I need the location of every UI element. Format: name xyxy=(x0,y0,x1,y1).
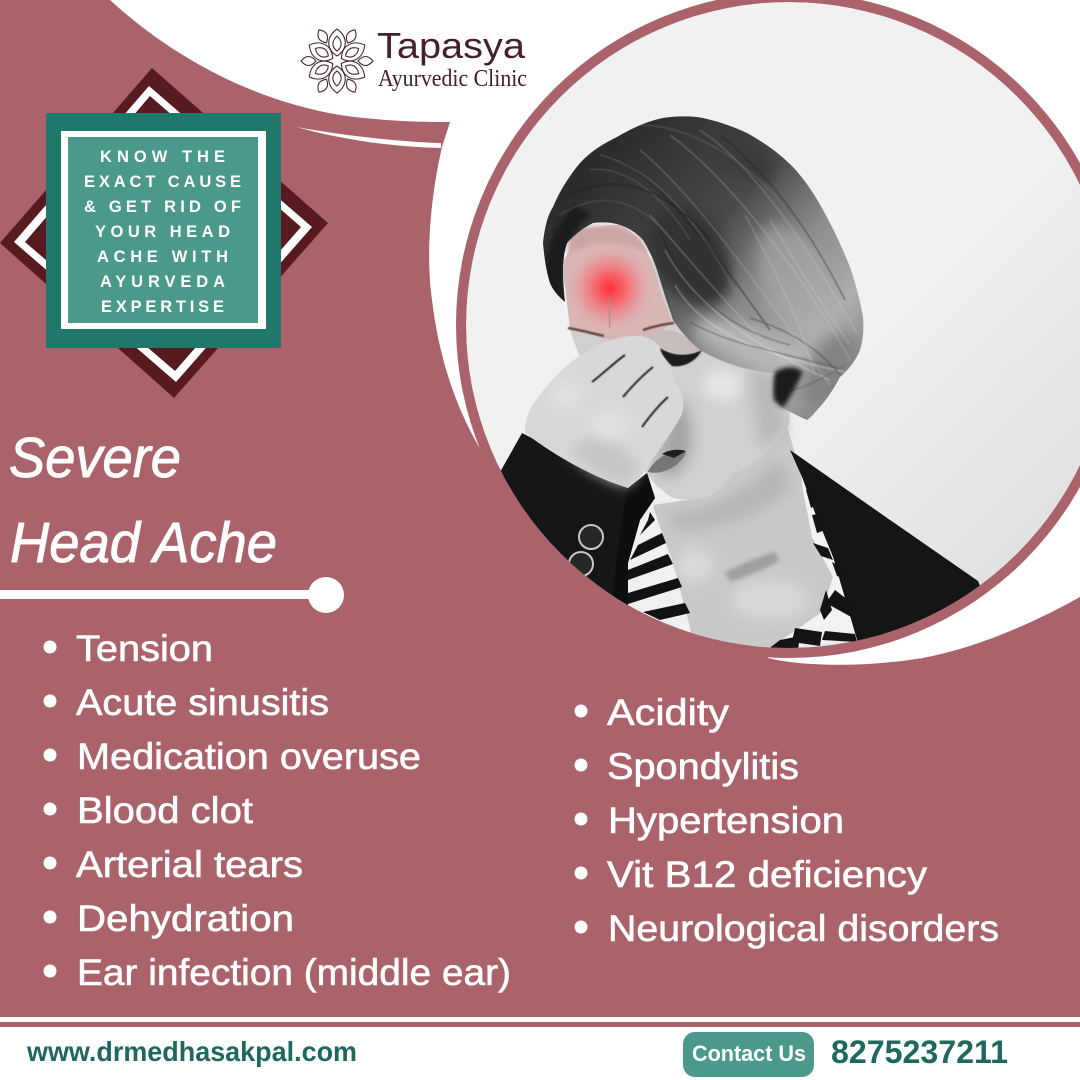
footer bar xyxy=(0,1017,1080,1080)
hair xyxy=(543,116,864,420)
list: causes left column xyxy=(44,628,511,993)
list: causes right column: Spondylitis xyxy=(607,746,799,787)
hand xyxy=(525,336,683,488)
hair strands xyxy=(560,125,858,390)
list: causes left column: Ear infection (middle ear) xyxy=(77,952,511,993)
red pain glow xyxy=(572,250,648,326)
callout text: & GET RID OF xyxy=(84,198,241,216)
closed eye lashes xyxy=(660,348,702,366)
heading divider with dot xyxy=(0,577,344,613)
list: causes right column: Vit B12 deficiency xyxy=(607,854,928,895)
brows and frown lines xyxy=(568,323,674,336)
icon: mandala flower xyxy=(301,28,373,94)
callout text: YOUR HEAD xyxy=(95,223,230,241)
contact button xyxy=(683,1032,814,1077)
light green square xyxy=(68,137,258,323)
phone number: 8275237211 xyxy=(831,1034,1008,1070)
list: causes right column: Neurological disorders xyxy=(608,908,999,949)
inner dark diamond xyxy=(25,96,301,371)
sleeve buttons xyxy=(579,525,603,549)
white crescent under the photo xyxy=(768,470,1080,665)
neck and chest xyxy=(653,425,833,650)
list: causes right column xyxy=(574,692,999,949)
callout text: KNOW THE xyxy=(100,148,225,166)
heading: Severe Head Ache: Severe xyxy=(9,426,181,490)
jacket right side xyxy=(790,450,980,641)
heading: Severe Head Ache: Head Ache xyxy=(10,511,277,575)
list: causes left column: Tension xyxy=(76,628,213,669)
lips xyxy=(648,452,686,473)
list: causes right column: Acidity xyxy=(607,692,730,733)
collar stripes right xyxy=(767,477,857,650)
dark under hair xyxy=(774,367,803,408)
white sliver xyxy=(296,127,441,148)
callout text: EXACT CAUSE xyxy=(84,173,241,191)
callout text: ACHE WITH xyxy=(97,248,228,266)
white swoosh behind photo xyxy=(110,0,1080,470)
sleeve xyxy=(500,433,655,605)
white diamond line xyxy=(14,86,312,382)
website: www.drmedhasakpal.com xyxy=(26,1036,357,1067)
callout: diamond frame with green box xyxy=(0,68,328,398)
list: causes left column: Acute sinusitis xyxy=(76,682,329,723)
heading: Severe Head Ache xyxy=(9,426,277,575)
logo: Tapasya Ayurvedic Clinic xyxy=(301,25,527,94)
forehead xyxy=(563,225,672,340)
green square xyxy=(46,113,281,348)
callout text xyxy=(84,148,241,316)
list: causes left column: Dehydration xyxy=(77,898,294,939)
face xyxy=(563,235,789,500)
list: causes left column: Arterial tears xyxy=(76,844,303,885)
list: causes left column: Medication overuse xyxy=(77,736,421,777)
white square xyxy=(61,131,266,329)
list: causes right column: Hypertension xyxy=(608,800,844,841)
ring around photo xyxy=(456,0,1080,658)
shirt stripes left xyxy=(628,526,690,632)
list: causes left column: Blood clot xyxy=(77,790,254,831)
callout text: EXPERTISE xyxy=(101,298,224,316)
callout text: AYURVEDA xyxy=(100,273,225,291)
finger lines xyxy=(592,355,668,427)
logo name: Tapasya xyxy=(377,25,526,66)
logo subtitle: Ayurvedic Clinic xyxy=(378,66,527,92)
outer dark diamond xyxy=(0,68,328,398)
contact button: Contact Us xyxy=(692,1041,806,1066)
eyelid xyxy=(642,330,700,353)
photo: woman with headache xyxy=(466,2,1080,660)
